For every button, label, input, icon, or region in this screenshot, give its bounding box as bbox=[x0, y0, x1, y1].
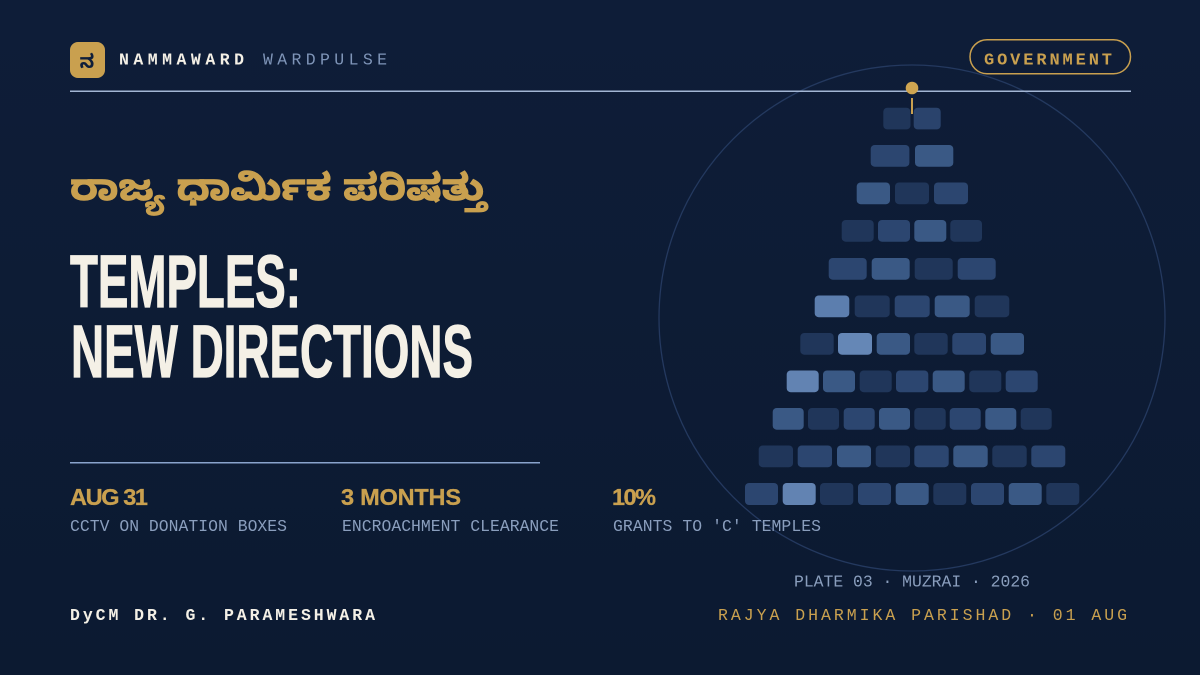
stats rule bbox=[70, 462, 540, 464]
stat: encroachment: ENCROACHMENT CLEARANCE bbox=[342, 517, 559, 536]
speaker name: DyCM DR. G. PARAMESHWARA bbox=[70, 606, 375, 625]
category pill: GOVERNMENT bbox=[984, 52, 1112, 70]
backdrop circle bbox=[659, 65, 1165, 571]
logo badge bbox=[70, 42, 105, 79]
stat: grants: 10% bbox=[612, 484, 656, 510]
main title bbox=[70, 240, 473, 393]
stat: grants bbox=[612, 484, 821, 536]
header rule bbox=[70, 90, 1131, 92]
main title: TEMPLES: bbox=[70, 240, 301, 323]
product name: WARDPULSE bbox=[263, 50, 387, 70]
main title: NEW DIRECTIONS bbox=[71, 310, 473, 393]
temple gopuram of blocks bbox=[745, 108, 1079, 505]
stat: encroachment bbox=[341, 484, 559, 536]
stat: CCTV deadline bbox=[70, 484, 287, 536]
Kannada heading: ರಾಜ್ಯ ಧಾರ್ಮಿಕ ಪರಿಷತ್ತು bbox=[70, 170, 489, 220]
stat: CCTV deadline: CCTV ON DONATION BOXES bbox=[70, 517, 287, 536]
stat: CCTV deadline: AUG 31 bbox=[70, 484, 148, 510]
stat: grants: GRANTS TO 'C' TEMPLES bbox=[613, 517, 821, 536]
logo badge: ನ bbox=[80, 52, 94, 79]
plate caption: PLATE 03 · MUZRAI · 2026 bbox=[794, 572, 1030, 592]
category pill bbox=[970, 40, 1130, 74]
brand name: NAMMAWARD bbox=[119, 50, 244, 70]
event line: RAJYA DHARMIKA PARISHAD · 01 AUG bbox=[718, 606, 1127, 625]
gold finial bbox=[906, 82, 918, 114]
stat: encroachment: 3 MONTHS bbox=[341, 484, 461, 510]
